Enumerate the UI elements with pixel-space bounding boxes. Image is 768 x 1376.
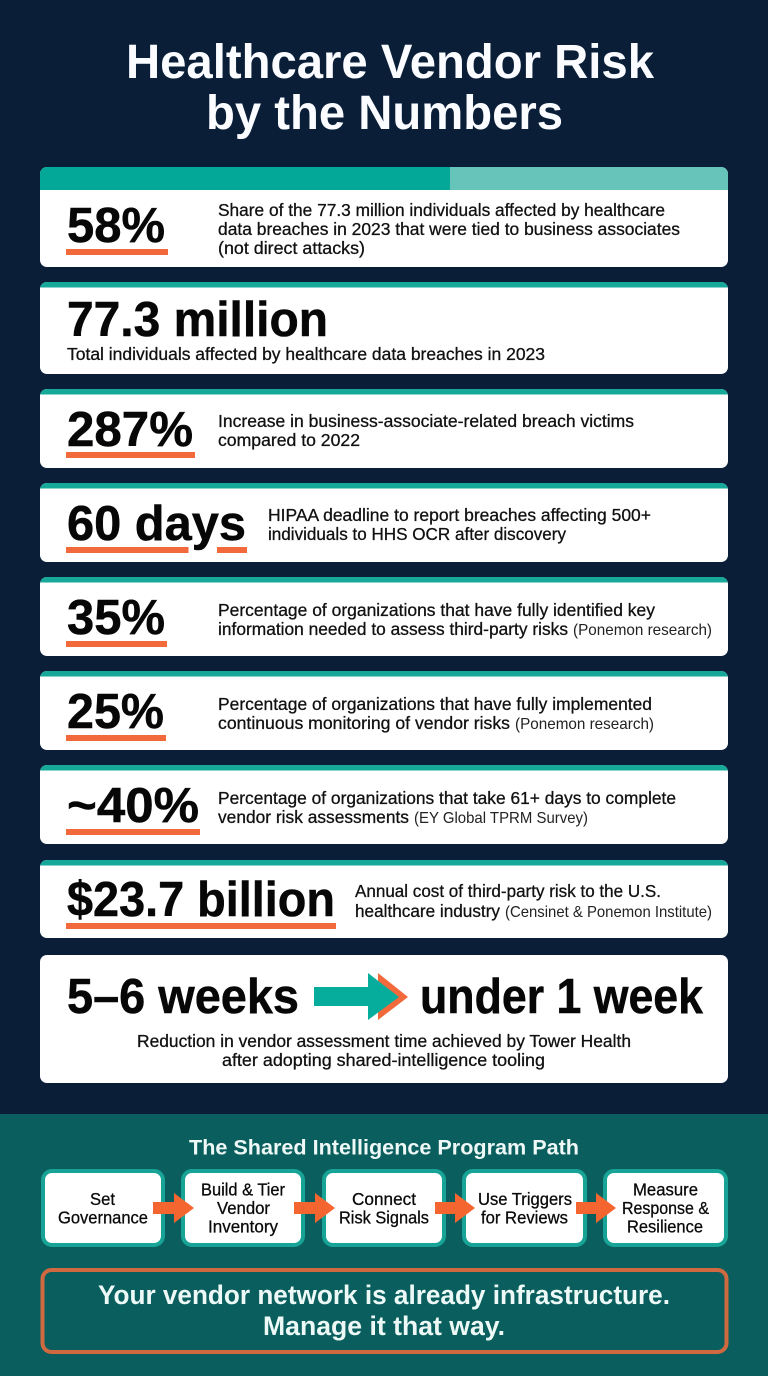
description: $23.7 billion xyxy=(355,881,712,921)
step: measure response and resilience xyxy=(605,1171,726,1245)
step: build and tier vendor inventory: Vendor xyxy=(217,1198,270,1218)
arrow: step 4 to 5 xyxy=(576,1193,616,1223)
description: 287%: Increase in business-associate-related breach victims xyxy=(218,411,634,431)
stat: under 1 week: under 1 week xyxy=(420,970,704,1024)
description: 25%: (Ponemon research) xyxy=(515,716,654,733)
callout: closing message: Manage it that way. xyxy=(263,1311,505,1341)
panel: $23.7 billion stat xyxy=(40,860,728,938)
description: 58% xyxy=(218,200,680,258)
panel: assessment time reduction xyxy=(40,955,728,1083)
description: 287%: compared to 2022 xyxy=(218,430,360,450)
step: set governance: Set xyxy=(90,1189,115,1209)
panel: ~40% stat xyxy=(40,765,728,844)
description: Tower Health: after adopting shared-intelligence tooling xyxy=(222,1050,545,1070)
description: 60 days: HIPAA deadline to report breaches affecting 500+ xyxy=(268,505,651,525)
step: connect risk signals: Risk Signals xyxy=(339,1208,429,1228)
step: measure response and resilience: Measure xyxy=(633,1180,698,1200)
stat: 5–6 weeks: 5–6 weeks xyxy=(67,970,299,1024)
step: connect risk signals xyxy=(324,1171,444,1245)
arrow: step 1 to 2 xyxy=(153,1193,194,1223)
description: 25%: continuous monitoring of vendor risks xyxy=(218,713,510,733)
description: total individuals: Total individuals affected by healthcare data breaches in 2023 xyxy=(67,344,545,364)
callout: closing message: Your vendor network is already infrastructure. xyxy=(98,1280,670,1310)
description: 287% xyxy=(218,411,634,450)
description: Tower Health: Reduction in vendor assessment time achieved by Tower Health xyxy=(137,1031,631,1051)
description: $23.7 billion: Annual cost of third-party risk to the U.S. xyxy=(355,881,661,901)
panel: 35% stat xyxy=(40,577,728,656)
description: 58%: Share of the 77.3 million individuals affected by healthcare xyxy=(218,200,665,220)
description: 25% xyxy=(218,694,654,733)
description: Tower Health xyxy=(137,1031,631,1070)
arrow: before to after xyxy=(314,973,408,1020)
title xyxy=(126,36,654,140)
step: use triggers for reviews xyxy=(464,1171,585,1245)
heading: program path: The Shared Intelligence Program Path xyxy=(189,1136,579,1160)
stat: 25%: 25% xyxy=(67,685,164,739)
stat: $23.7 billion: $23.7 billion xyxy=(67,873,335,927)
step: measure response and resilience: Response & xyxy=(622,1198,709,1218)
stat: 58%: 58% xyxy=(67,199,165,253)
description: 60 days xyxy=(268,505,651,544)
step: set governance xyxy=(43,1171,163,1245)
stat: 35%: 35% xyxy=(67,591,165,645)
step: build and tier vendor inventory: Build & Tier xyxy=(201,1180,285,1200)
stat: 60 days: 60 days xyxy=(67,497,246,551)
description: $23.7 billion: (Censinet & Ponemon Institute) xyxy=(505,904,712,921)
description: $23.7 billion: healthcare industry xyxy=(355,901,500,921)
description: ~40% xyxy=(218,788,676,827)
arrow: step 3 to 4 xyxy=(435,1193,475,1223)
description: 35% xyxy=(218,600,712,639)
description: 35%: Percentage of organizations that have fully identified key xyxy=(218,600,655,620)
stat: 77.3 million: 77.3 million xyxy=(67,293,328,347)
panel: 60 days stat xyxy=(40,483,728,562)
title: Healthcare Vendor Risk xyxy=(126,36,654,89)
description: ~40%: Percentage of organizations that take 61+ days to complete xyxy=(218,788,676,808)
description: 25%: Percentage of organizations that have fully implemented xyxy=(218,694,652,714)
stat: ~40%: ~40% xyxy=(67,779,199,833)
step: use triggers for reviews: Use Triggers xyxy=(478,1189,572,1209)
description: 35%: (Ponemon research) xyxy=(573,622,712,639)
title: by the Numbers xyxy=(206,87,563,140)
step: measure response and resilience: Resilience xyxy=(627,1216,703,1236)
panel: program path footer xyxy=(0,1114,768,1376)
description: 58%: (not direct attacks) xyxy=(218,238,365,258)
arrow: step 2 to 3 xyxy=(294,1193,335,1223)
panel: 25% stat xyxy=(40,671,728,750)
step: use triggers for reviews: for Reviews xyxy=(481,1208,568,1228)
step: build and tier vendor inventory xyxy=(183,1171,303,1245)
step: set governance: Governance xyxy=(58,1208,148,1228)
progress bar: 58% xyxy=(40,167,728,190)
step: build and tier vendor inventory: Inventory xyxy=(208,1216,278,1236)
description: 60 days: individuals to HHS OCR after discovery xyxy=(268,524,566,544)
description: 35%: information needed to assess third-party risks xyxy=(218,619,568,639)
panel: 287% stat xyxy=(40,389,728,468)
description: ~40%: (EY Global TPRM Survey) xyxy=(414,810,588,827)
stat: 287%: 287% xyxy=(67,403,193,457)
panel: 77.3 million stat xyxy=(40,282,728,374)
description: 58%: data breaches in 2023 that were tied to business associates xyxy=(218,219,680,239)
step: connect risk signals: Connect xyxy=(352,1189,416,1209)
callout: closing message xyxy=(42,1270,726,1352)
panel: 58% stat xyxy=(40,167,728,267)
description: ~40%: vendor risk assessments xyxy=(218,807,409,827)
